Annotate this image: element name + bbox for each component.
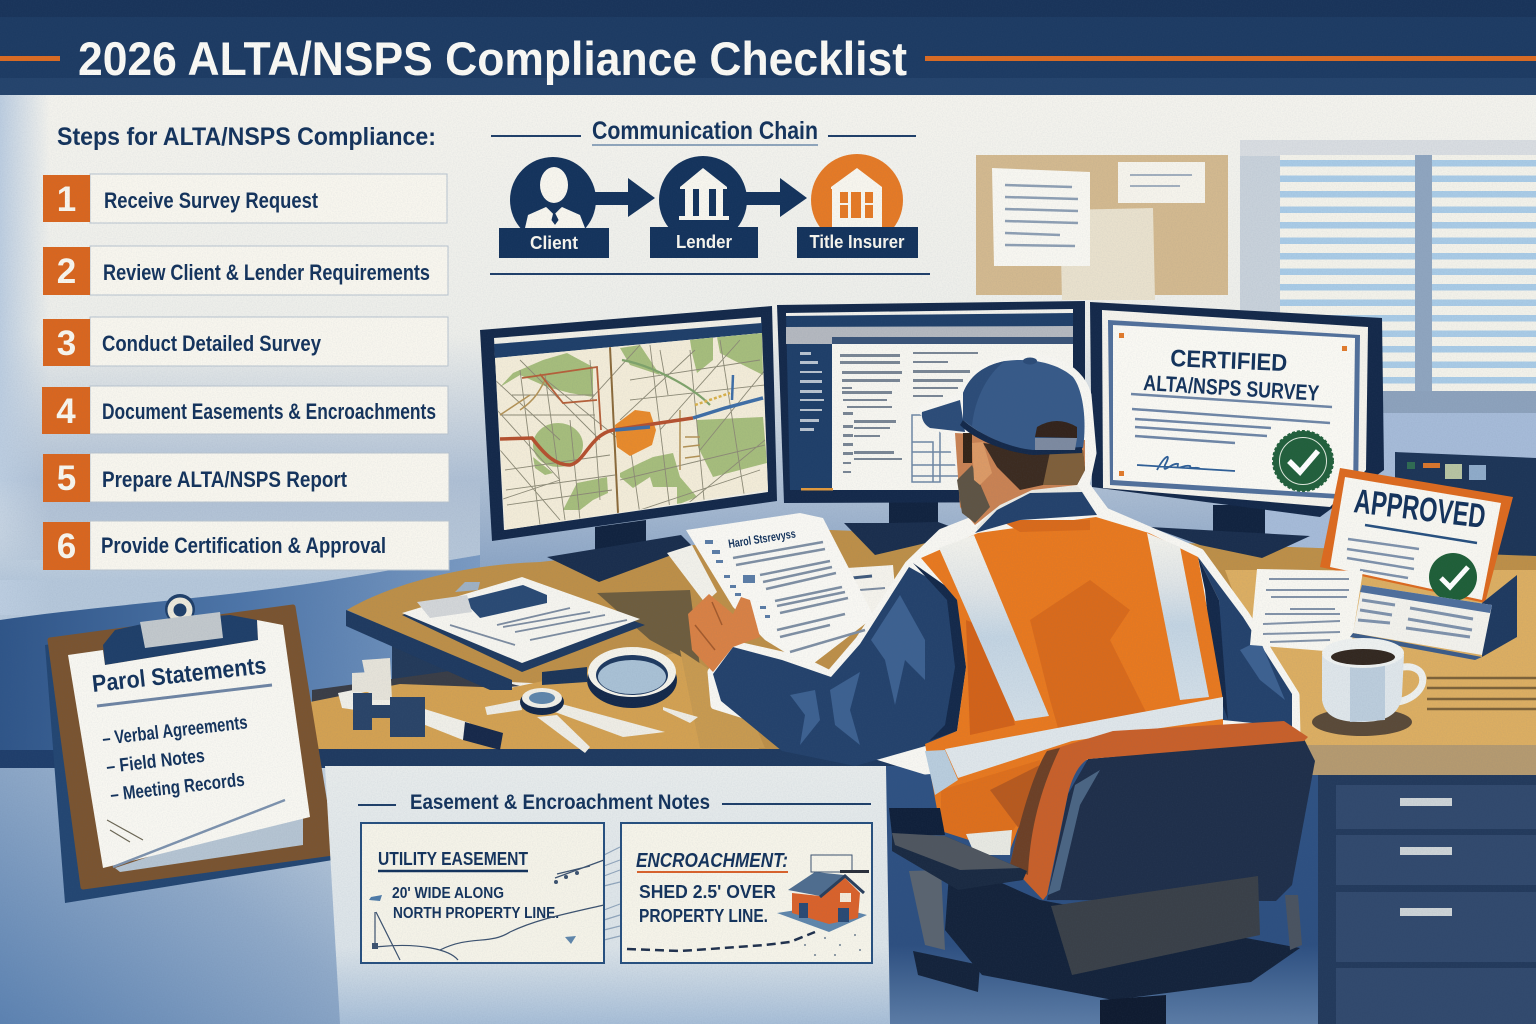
handheld report pages <box>667 513 874 667</box>
step 6 <box>43 521 449 570</box>
hi-vis orange vest <box>921 517 1223 855</box>
step 1: 1 <box>57 180 76 219</box>
note: utility easement: NORTH PROPERTY LINE. <box>393 905 559 922</box>
step 2: Review Client & Lender Requirements <box>103 260 430 285</box>
panel: steps for ALTA/NSPS compliance <box>42 123 449 570</box>
step 3: Conduct Detailed Survey <box>102 331 322 356</box>
card holder <box>1350 575 1517 660</box>
equipment on back shelf <box>1395 452 1536 575</box>
step 4: Document Easements & Encroachments <box>102 399 436 424</box>
clipboard heading: Parol Statements <box>91 652 268 698</box>
clipboard list <box>101 712 249 806</box>
arrow: lender to title insurer <box>745 178 807 217</box>
corkboard with pinned papers <box>976 155 1228 300</box>
panel: easement and encroachment notes <box>325 766 890 1024</box>
desk clipboard with papers <box>402 577 645 672</box>
chain heading: Communication Chain <box>592 117 818 145</box>
step 1: Receive Survey Request <box>104 188 319 213</box>
approved sign <box>1320 468 1513 603</box>
navy desk shelf <box>312 640 520 705</box>
icon: lender: Lender <box>676 232 732 252</box>
step 5 <box>43 453 449 502</box>
step 5: Prepare ALTA/NSPS Report <box>102 467 348 492</box>
certificate text <box>1143 345 1320 406</box>
map content <box>495 333 768 530</box>
clipboard: parol statements <box>45 594 333 903</box>
coffee mug <box>1312 638 1423 736</box>
worker hand <box>688 594 760 672</box>
paper on desk <box>1250 569 1363 653</box>
clipboard list: – Verbal Agreements <box>101 712 249 750</box>
map sketch between notes <box>604 847 620 940</box>
step 6: Provide Certification & Approval <box>101 533 386 558</box>
title: 2026 ALTA/NSPS Compliance Checklist <box>78 32 907 85</box>
seal: certified check <box>1273 431 1333 491</box>
clipboard board <box>50 607 333 887</box>
step 4 <box>42 386 448 434</box>
certificate text: ALTA/NSPS SURVEY <box>1143 370 1320 406</box>
note: utility easement <box>361 823 604 963</box>
icon: title insurer: Title Insurer <box>810 232 904 252</box>
blue cap <box>922 358 1085 455</box>
icon: lender <box>650 156 758 258</box>
step 6: 6 <box>57 527 76 566</box>
clipboard list: – Field Notes <box>105 746 206 778</box>
note: utility easement: UTILITY EASEMENT <box>378 849 528 869</box>
monitor: report document <box>777 301 1085 555</box>
step 3: 3 <box>57 324 76 363</box>
clipboard shadow <box>45 607 333 903</box>
step 2 <box>43 246 448 295</box>
note: encroachment <box>621 823 872 963</box>
steps heading: Steps for ALTA/NSPS Compliance: <box>57 123 436 151</box>
step 5: 5 <box>57 459 76 498</box>
certificate text: CERTIFIED <box>1170 345 1288 377</box>
chair lower frame <box>889 808 1302 1024</box>
monitor: survey map <box>480 306 777 582</box>
worker white outline <box>712 358 1296 770</box>
survey worker <box>712 358 1296 855</box>
icon: shed house <box>777 855 869 932</box>
panel: communication chain <box>490 117 930 274</box>
magnifying glass and dividers <box>485 647 698 753</box>
survey instrument <box>338 658 503 750</box>
clipboard clip <box>103 594 258 665</box>
file cabinet <box>1318 775 1536 1024</box>
back paper stack <box>847 565 897 617</box>
handheld report pages: Harol Stsrevyss <box>727 526 797 551</box>
arrow: client to lender <box>590 178 655 217</box>
icon: title insurer <box>797 154 918 258</box>
chair back <box>1010 721 1315 901</box>
monitor: certified survey <box>1090 302 1384 558</box>
icon: client <box>499 157 609 258</box>
collar <box>975 485 1097 533</box>
note: encroachment: PROPERTY LINE. <box>639 906 768 926</box>
clipboard list: – Meeting Records <box>109 770 246 806</box>
step 3 <box>43 317 448 366</box>
head and neck <box>955 433 1085 525</box>
chair seat and armrest <box>892 833 1260 975</box>
step 1 <box>43 174 447 223</box>
clipboard under sheet <box>115 805 303 872</box>
note: encroachment: ENCROACHMENT: <box>636 850 788 872</box>
desk surface <box>310 530 1536 775</box>
icon: approved check <box>1429 553 1477 601</box>
window with blinds <box>1240 140 1536 563</box>
note: encroachment: SHED 2.5' OVER <box>639 882 776 902</box>
jacket arms <box>713 557 1292 766</box>
note: utility easement: 20' WIDE ALONG <box>392 885 504 902</box>
step 2: 2 <box>57 252 76 291</box>
clipboard paper <box>68 620 310 868</box>
notes heading: Easement & Encroachment Notes <box>410 791 710 814</box>
header banner <box>0 0 1536 95</box>
office chair <box>889 721 1315 1024</box>
icon: client: Client <box>530 233 578 253</box>
step 4: 4 <box>56 392 76 431</box>
